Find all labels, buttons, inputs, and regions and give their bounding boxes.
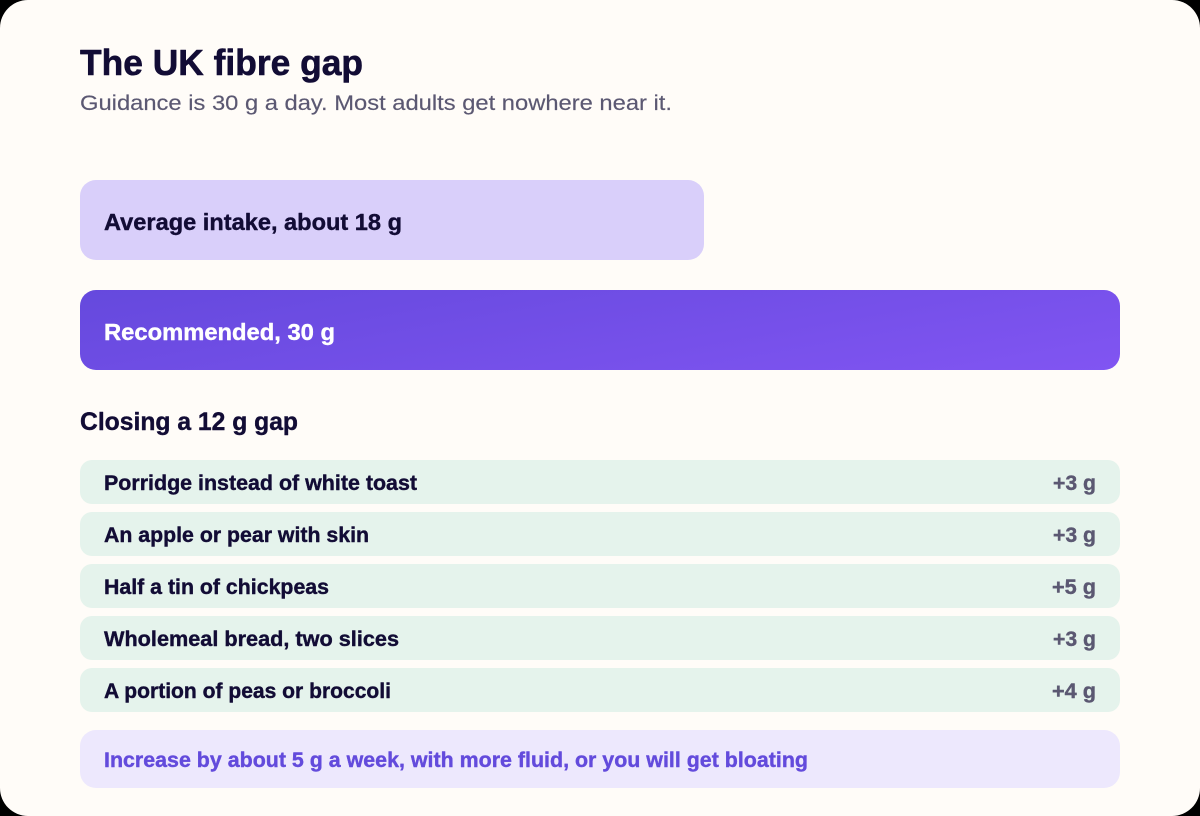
- bar: average intake: [80, 180, 704, 260]
- subtitle: Guidance is 30 g a day. Most adults get nowhere near it.: [80, 92, 672, 115]
- row: porridge: +3 g: [1053, 472, 1096, 495]
- title: The UK fibre gap: [80, 42, 363, 83]
- row: wholemeal bread: [80, 616, 1120, 660]
- bar: average intake: Average intake, about 18 g: [104, 209, 402, 235]
- bar: recommended: Recommended, 30 g: [104, 319, 335, 345]
- row: wholemeal bread: +3 g: [1053, 628, 1096, 651]
- row: chickpeas: [80, 564, 1120, 608]
- row: apple: +3 g: [1053, 524, 1096, 547]
- bar: recommended: [80, 290, 1120, 370]
- row: porridge: Porridge instead of white toast: [104, 472, 417, 495]
- row: chickpeas: Half a tin of chickpeas: [104, 576, 329, 599]
- list of swaps: [80, 460, 1120, 712]
- callout: Increase by about 5 g a week, with more fluid, or you will get bloating: [104, 749, 808, 772]
- row: peas or broccoli: [80, 668, 1120, 712]
- row: porridge: [80, 460, 1120, 504]
- row: peas or broccoli: A portion of peas or broccoli: [104, 680, 391, 703]
- row: peas or broccoli: +4 g: [1052, 680, 1096, 703]
- section heading: Closing a 12 g gap: [80, 408, 298, 436]
- row: wholemeal bread: Wholemeal bread, two slices: [104, 628, 399, 651]
- row: apple: An apple or pear with skin: [104, 524, 369, 547]
- row: apple: [80, 512, 1120, 556]
- row: chickpeas: +5 g: [1052, 576, 1096, 599]
- callout: [80, 730, 1120, 788]
